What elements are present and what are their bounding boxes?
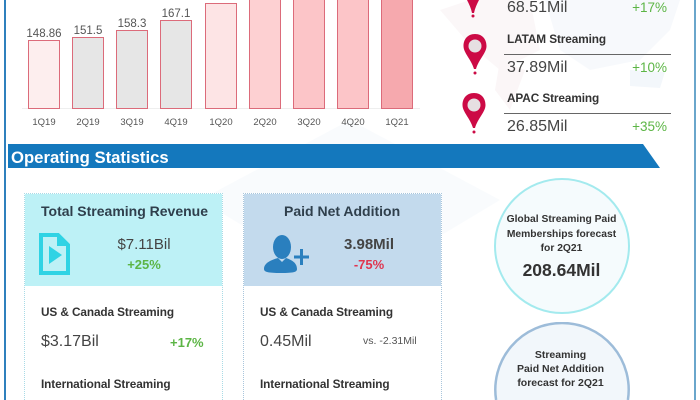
panel: Paid Net Addition xyxy=(243,193,442,400)
icon: user with plus xyxy=(264,235,309,273)
icon: map pin EMEA xyxy=(467,0,479,18)
section banner: Operating Statistics xyxy=(8,144,660,168)
bar chart: 4Q19 xyxy=(164,117,188,128)
bar chart: 1Q19 xyxy=(32,117,56,128)
label: International Streaming: International Streaming xyxy=(41,377,170,391)
callout: memberships forecast xyxy=(494,178,630,314)
change: -75% xyxy=(354,257,384,272)
heading: Paid Net Addition xyxy=(284,203,400,219)
change: APAC: +35% xyxy=(632,119,667,134)
heading: Total Streaming Revenue xyxy=(41,203,208,219)
value: $7.11Bil xyxy=(117,236,171,253)
icon: video file xyxy=(39,233,70,275)
bar chart: 151.5 xyxy=(74,25,102,37)
label: APAC Streaming: APAC Streaming xyxy=(507,91,599,105)
bar chart: 2Q20 xyxy=(253,117,277,128)
bar chart: 2Q19 xyxy=(76,117,100,128)
value: 3.98Mil xyxy=(344,236,394,253)
bar chart: 1Q21 xyxy=(385,117,409,128)
value: LATAM: 37.89Mil xyxy=(507,59,567,76)
label: International Streaming: International Streaming xyxy=(260,377,389,391)
bar chart: 4Q20 xyxy=(341,117,365,128)
callout text: Streaming xyxy=(535,349,586,361)
bar chart: 158.3 xyxy=(118,18,146,30)
regional streaming list xyxy=(462,0,671,135)
label: US & Canada Streaming: US & Canada Streaming xyxy=(260,305,393,319)
change: LATAM: +10% xyxy=(632,60,667,75)
change: EMEA: +17% xyxy=(632,0,667,15)
callout value: 208.64Mil xyxy=(523,260,600,280)
bar chart: 148.86 xyxy=(26,28,62,40)
callout text: forecast for 2Q21 xyxy=(517,377,604,389)
callout text xyxy=(517,349,604,389)
value: US & Canada: $3.17Bil xyxy=(41,333,99,350)
panel header xyxy=(25,194,222,286)
label: US & Canada Streaming: US & Canada Streaming xyxy=(41,305,174,319)
bar chart xyxy=(22,0,420,128)
bar chart: 1Q20 xyxy=(209,117,233,128)
comparison: vs. -2.31Mil xyxy=(363,335,417,347)
callout text: for 2Q21 xyxy=(541,243,582,254)
icon: map pin LATAM xyxy=(464,34,486,74)
bar chart: 3Q19 xyxy=(120,117,144,128)
rule xyxy=(504,54,671,55)
panel: Total Streaming Revenue xyxy=(24,193,223,400)
callout text: Paid Net Addition xyxy=(517,363,604,375)
panel header xyxy=(244,194,441,286)
callout text: Global Streaming Paid xyxy=(507,214,616,225)
callout text xyxy=(507,214,616,254)
change: +25% xyxy=(127,257,161,272)
bar chart: 167.1 xyxy=(162,8,190,20)
callout text: Memberships forecast xyxy=(507,228,616,240)
section banner: Operating Statistics: Operating Statistics xyxy=(11,148,169,167)
bar chart: 3Q20 xyxy=(297,117,321,128)
callout: net addition forecast xyxy=(494,322,630,400)
label: LATAM Streaming: LATAM Streaming xyxy=(507,32,606,46)
rule xyxy=(504,113,671,114)
change: US & Canada: +17% xyxy=(170,335,204,350)
value: APAC: 26.85Mil xyxy=(507,118,567,135)
icon: map pin APAC xyxy=(462,93,486,134)
value: US & Canada: 0.45Mil xyxy=(260,333,312,350)
